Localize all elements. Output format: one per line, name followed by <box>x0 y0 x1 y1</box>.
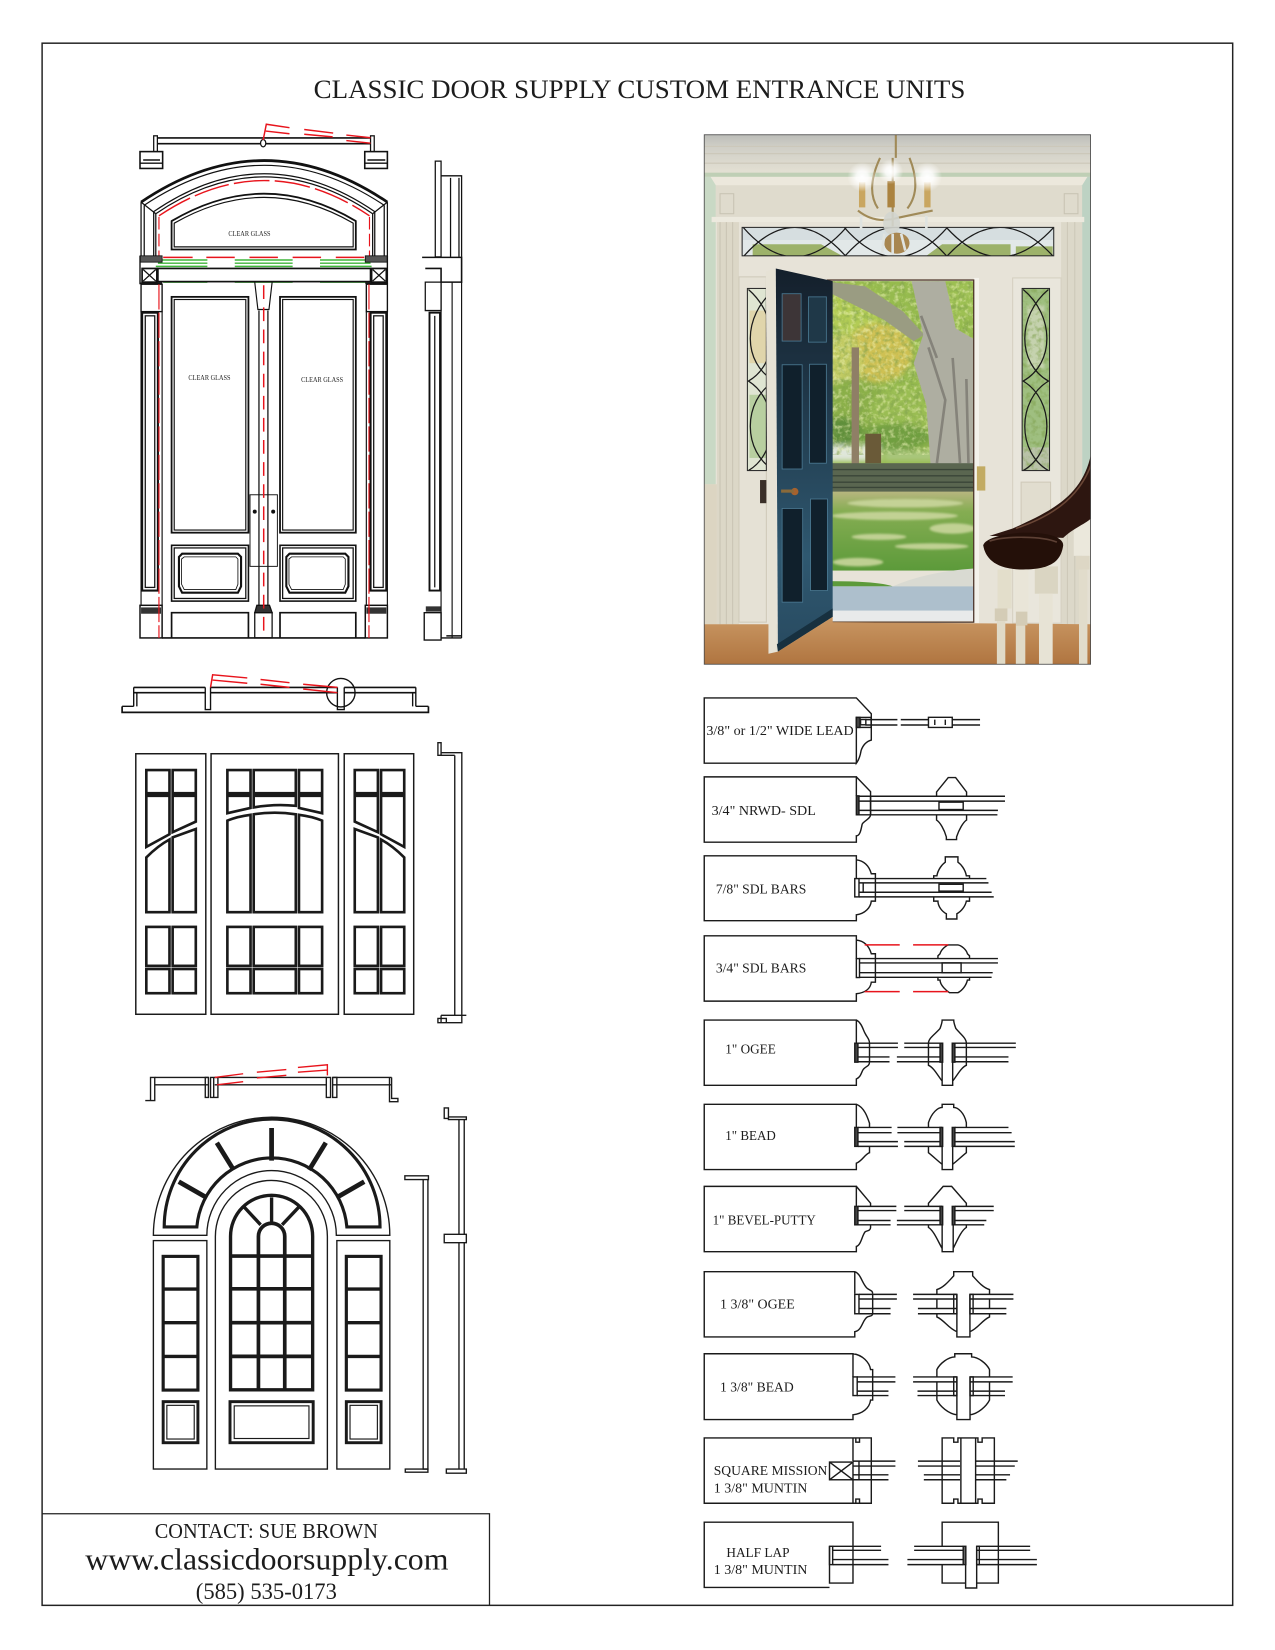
row: 1 3/8 ogee: 1 3/8" OGEE <box>720 1296 795 1311</box>
cornice with green and red revision marks <box>140 256 387 284</box>
right sidelight <box>344 754 414 1014</box>
row: 7/8 SDL bars: 7/8" SDL BARS <box>716 882 806 897</box>
right door leaf <box>280 297 356 638</box>
row: square mission muntin: SQUARE MISSION <box>714 1463 828 1478</box>
right sidelight <box>1022 288 1050 471</box>
garden view through doorway <box>832 281 974 621</box>
drawing: side section of arched door <box>422 161 462 640</box>
row: 1 3/8 ogee <box>704 1272 1013 1337</box>
row: square mission muntin <box>704 1438 1018 1503</box>
staircase newel and balusters <box>983 451 1092 665</box>
fanlight <box>153 1117 390 1235</box>
plan view of arched door unit <box>140 124 387 168</box>
ceiling and crown moulding <box>704 135 1091 484</box>
row: 3/8 or 1/2 wide lead: 3/8" or 1/2" WIDE LEAD <box>706 723 854 738</box>
row: 1 3/8 bead <box>704 1354 1013 1420</box>
row: 3/4 SDL bars: 3/4" SDL BARS <box>716 961 806 976</box>
title: CLASSIC DOOR SUPPLY CUSTOM ENTRANCE UNITS <box>314 75 965 104</box>
row: 1 inch bead <box>704 1104 1015 1170</box>
row: square mission muntin: 1 3/8" MUNTIN <box>714 1481 808 1496</box>
wood floor <box>704 617 1091 664</box>
left sidelight <box>153 1241 207 1469</box>
row: half lap muntin: 1 3/8" MUNTIN <box>714 1562 808 1577</box>
right door leaf: CLEAR GLASS <box>301 375 343 384</box>
arch head and transom: CLEAR GLASS <box>228 229 271 238</box>
open blue door <box>760 268 985 654</box>
row: 1 inch bevel putty: 1" BEVEL-PUTTY <box>713 1212 816 1227</box>
row: 1 inch ogee: 1" OGEE <box>725 1042 776 1057</box>
right sidelight <box>337 1241 390 1469</box>
photo: open front door with leaded glass <box>704 135 1092 665</box>
left door leaf <box>172 297 248 638</box>
center arched door <box>215 1180 327 1469</box>
transom window <box>742 227 1054 257</box>
row: 1 inch ogee <box>704 1020 1016 1085</box>
center door <box>211 754 338 1014</box>
drawing: arched double door elevation with plan and section <box>140 124 387 638</box>
entablature over door <box>711 177 1087 222</box>
row: half lap muntin: HALF LAP <box>726 1545 790 1560</box>
contact box: www.classicdoorsupply.com <box>85 1543 449 1577</box>
door casing and trim <box>704 222 1082 624</box>
left door leaf: CLEAR GLASS <box>188 373 231 382</box>
row: 1 3/8 bead: 1 3/8" BEAD <box>720 1380 794 1395</box>
contact box: (585) 535-0173 <box>196 1579 337 1605</box>
row: 1 inch bevel putty <box>704 1186 994 1252</box>
row: half lap muntin <box>704 1522 1037 1588</box>
drawing: plan view of arched door with sidelights <box>145 1065 398 1102</box>
row: 7/8 SDL bars <box>704 856 994 921</box>
drawing: door and sidelight elevation with muntin grids <box>136 754 414 1014</box>
contact box <box>42 1514 489 1605</box>
row: 3/4 NRWD SDL <box>704 777 1005 842</box>
row: 3/4 NRWD SDL: 3/4" NRWD- SDL <box>712 803 816 818</box>
photo border <box>704 135 1091 664</box>
row: 1 inch bead: 1" BEAD <box>725 1128 776 1143</box>
row: 3/8 or 1/2 wide lead <box>704 698 980 763</box>
muntin profiles column <box>704 698 1037 1588</box>
center mullion with lock plates <box>159 282 369 638</box>
arch head and transom <box>141 161 387 257</box>
side pilasters <box>140 284 387 638</box>
row: 3/4 SDL bars <box>704 936 998 1001</box>
contact box: CONTACT: SUE BROWN <box>155 1519 378 1543</box>
chandelier <box>847 135 942 255</box>
drawing: plan view of door with sidelights <box>122 675 428 712</box>
drawing: arched door with fanlight and sidelights <box>153 1117 390 1469</box>
left sidelight <box>746 288 767 472</box>
drawing: side section of door with sidelights <box>438 743 466 1023</box>
drawing: side sections of arched door <box>405 1108 466 1473</box>
left sidelight <box>136 754 206 1014</box>
